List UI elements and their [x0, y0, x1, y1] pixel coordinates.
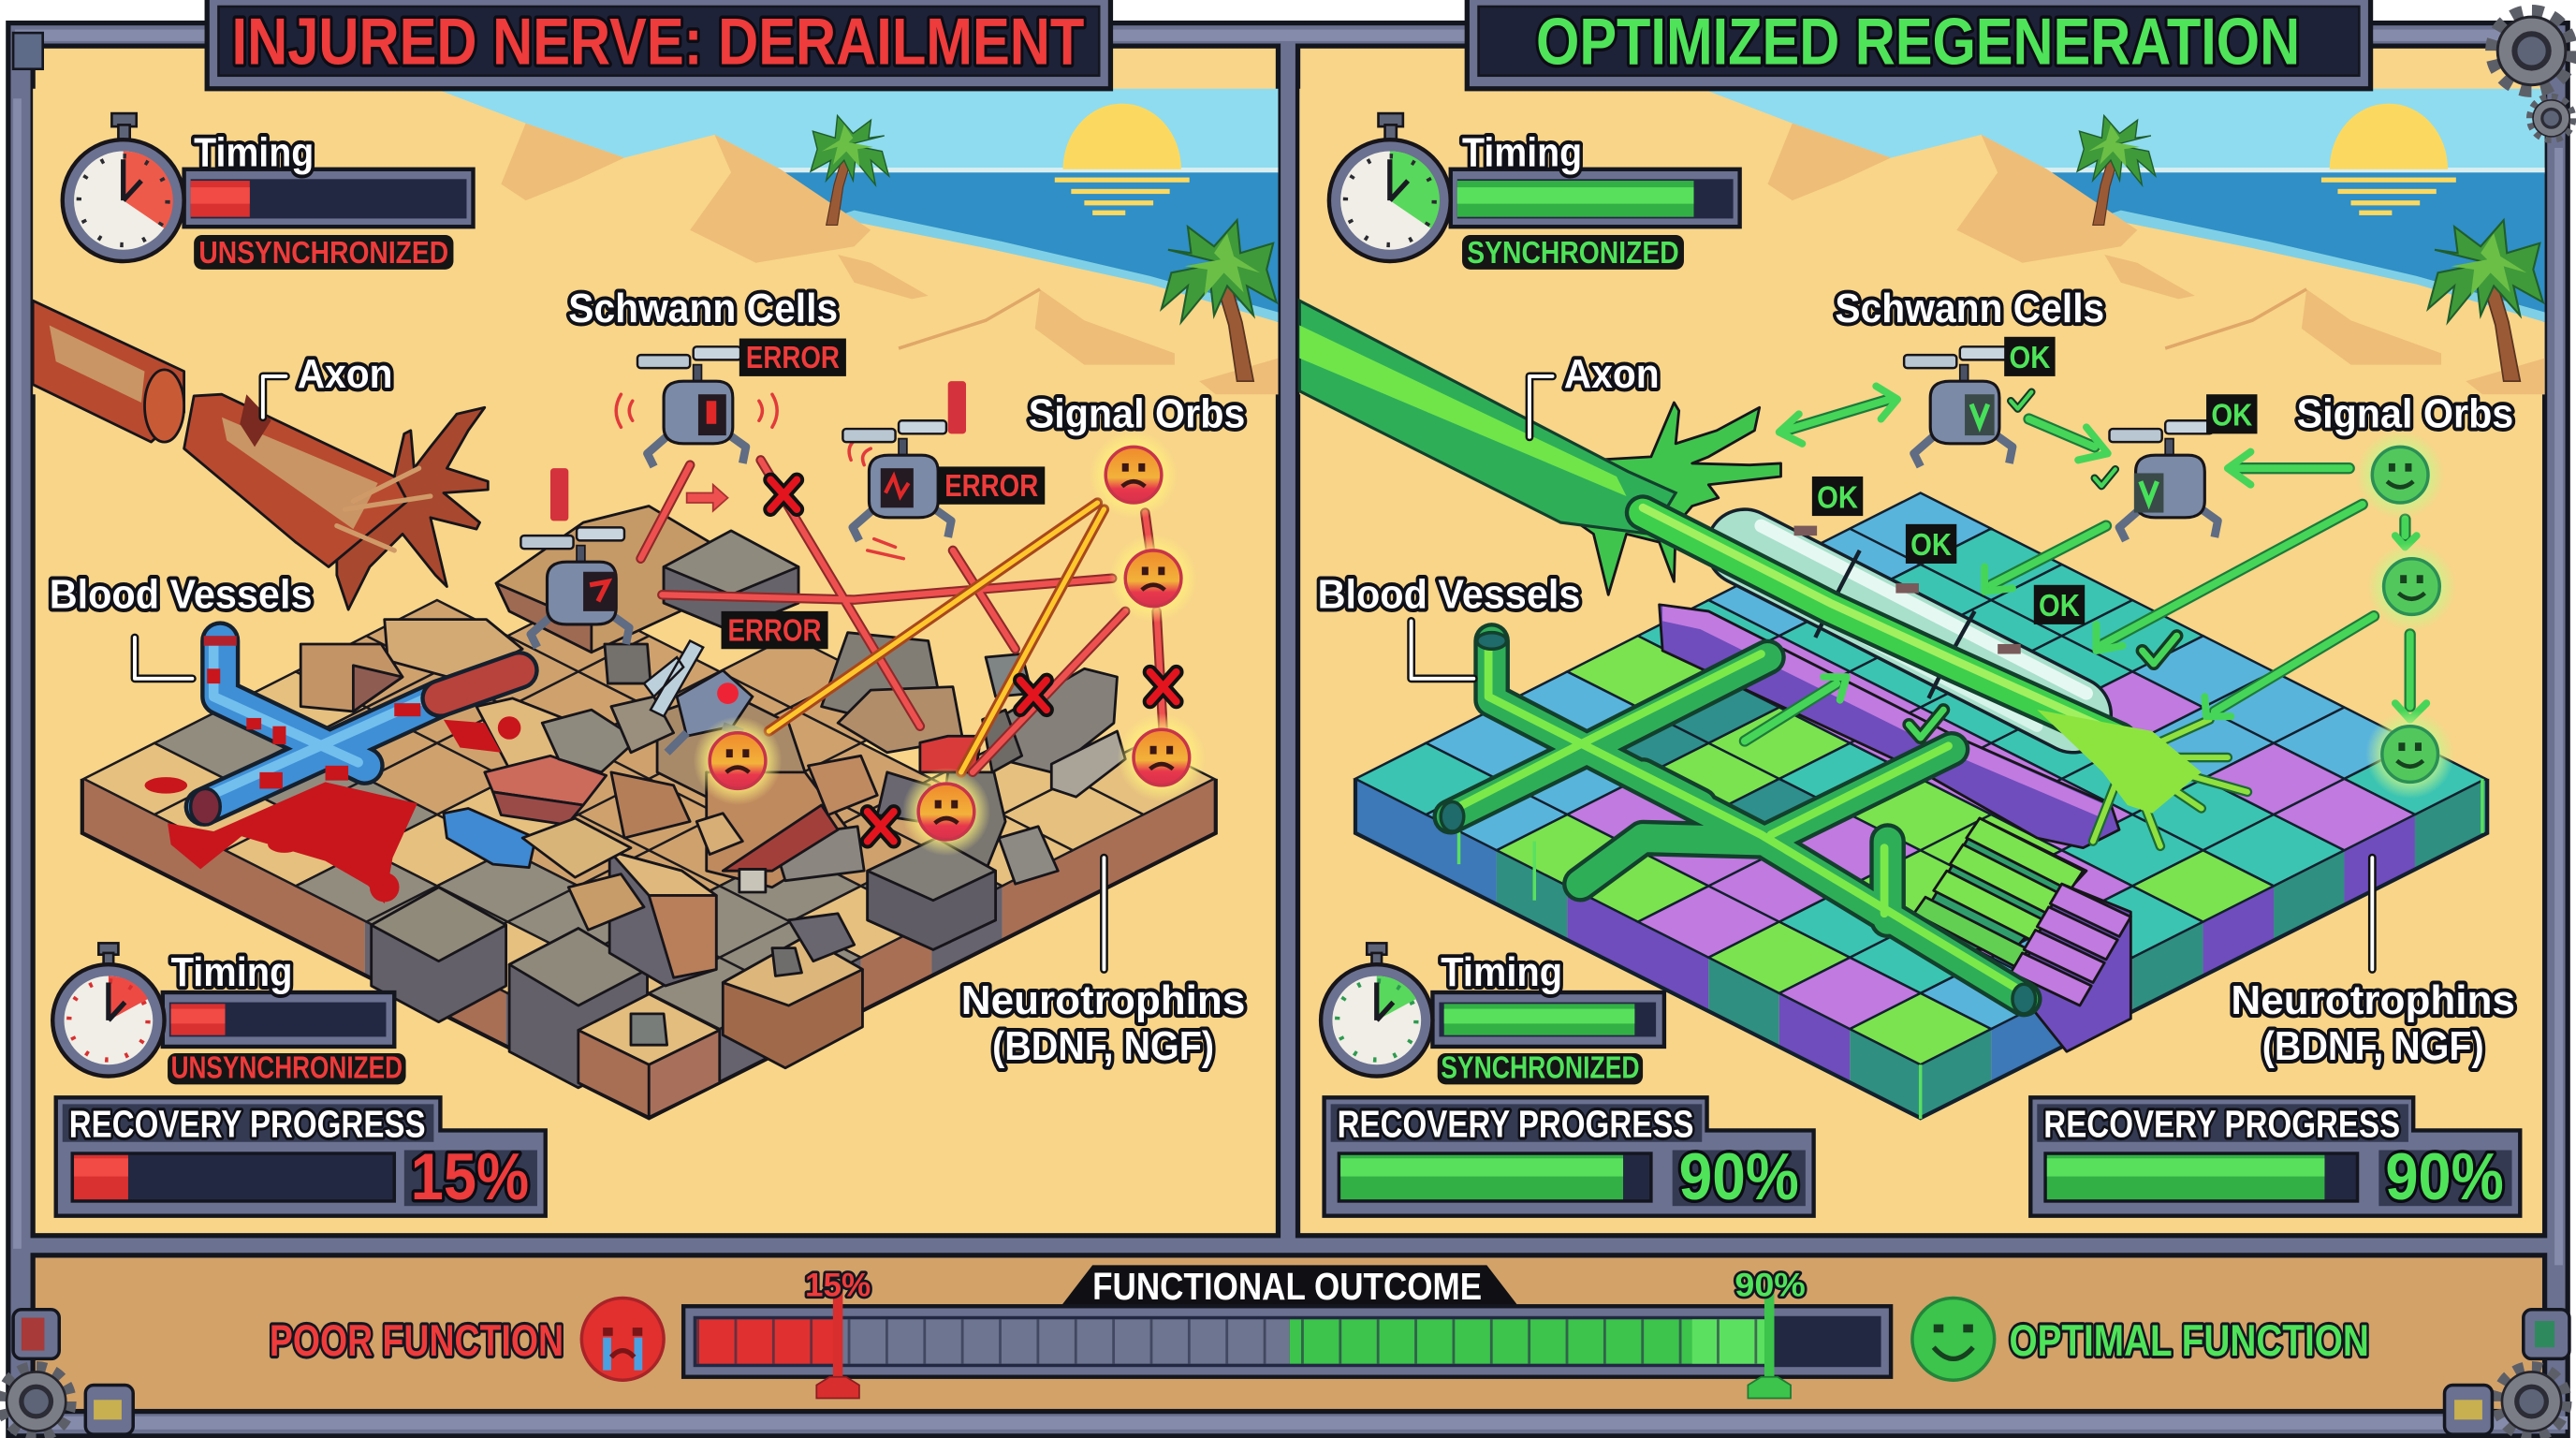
poor function label: POOR FUNCTION — [270, 1316, 564, 1366]
outcome gauge — [683, 1306, 1891, 1377]
labels left: Axon — [298, 351, 393, 397]
title right: OPTIMIZED REGENERATION — [1536, 4, 2300, 78]
labels right: (BDNF, NGF) — [2262, 1023, 2484, 1069]
recovery progress 90 percent: right — [2030, 1097, 2520, 1216]
timing widget: top left: UNSYNCHRONIZED — [198, 236, 448, 271]
recovery progress 90 percent: left — [1325, 1097, 1814, 1216]
beach background left — [33, 89, 1278, 394]
schwann tube sheath — [1725, 526, 2086, 726]
axon: severed — [33, 301, 488, 609]
beach background right — [1299, 89, 2545, 394]
rubble blocks — [300, 506, 1125, 1117]
labels left: Neurotrophins — [961, 977, 1245, 1023]
happy signal orbs — [2356, 431, 2456, 799]
schwann cell drones: ok — [1904, 346, 2217, 540]
title left: INJURED NERVE: DERAILMENT — [232, 4, 1084, 78]
labels right: Blood Vessels — [1318, 571, 1580, 617]
red error arrows — [550, 381, 1177, 842]
schwann cell drones: error — [520, 346, 951, 753]
timing widget: top right: SYNCHRONIZED — [1467, 236, 1679, 271]
green ok arrows — [1745, 386, 2426, 741]
blood vessels: healthy — [1441, 633, 2036, 1014]
labels right: Neurotrophins — [2231, 977, 2515, 1023]
timing widget: top right — [1329, 113, 1740, 271]
labels left: Blood Vessels — [50, 571, 313, 617]
recovery progress 90 percent: left: 90% — [1679, 1139, 1799, 1213]
labels right: Axon — [1564, 351, 1660, 397]
recovery progress 15 percent — [56, 1097, 546, 1216]
recovery progress 15 percent: RECOVERY PROGRESS — [69, 1102, 426, 1145]
recovery progress 90 percent: right: RECOVERY PROGRESS — [2043, 1102, 2400, 1145]
timing widget: lower left: Timing — [171, 949, 292, 995]
sad signal orbs — [694, 431, 1206, 856]
timing widget: lower right — [1321, 943, 1664, 1085]
panel: injured nerve — [33, 46, 1278, 1236]
raised green tile highlights — [1457, 779, 2484, 1119]
purple raised strip — [1660, 605, 2119, 848]
labels right — [1318, 286, 2515, 1069]
icon: happy face — [1912, 1298, 1995, 1380]
marker 90 percent: 90% — [1734, 1268, 1806, 1304]
labels right: Signal Orbs — [2297, 390, 2513, 436]
timing widget: top left — [63, 113, 474, 271]
timing widget: lower left — [52, 943, 406, 1085]
axon: regenerating — [1299, 301, 2247, 846]
isometric platform: rubble — [82, 493, 1216, 1119]
recovery progress 90 percent: right: 90% — [2385, 1139, 2504, 1213]
timing widget: top left: Timing — [194, 129, 314, 175]
blood pool — [145, 716, 520, 903]
labels left: Signal Orbs — [1029, 390, 1245, 436]
timing widget: top right: Timing — [1462, 129, 1582, 175]
labels right: OK — [2211, 399, 2252, 433]
labels left: ERROR — [944, 469, 1038, 504]
labels left: ERROR — [746, 341, 840, 375]
labels right: OK — [1817, 480, 1858, 515]
marker 90 percent — [1734, 1268, 1806, 1399]
marker 15 percent: 15% — [805, 1268, 871, 1304]
outcome heading: FUNCTIONAL OUTCOME — [1092, 1265, 1482, 1308]
labels right: Schwann Cells — [1835, 286, 2104, 331]
recovery progress 15 percent: 15% — [411, 1139, 529, 1213]
isometric platform: healthy tiles — [1355, 493, 2487, 1119]
panel: optimized regeneration — [1298, 46, 2545, 1236]
optimal function label: OPTIMAL FUNCTION — [2009, 1316, 2369, 1366]
icon: crying face — [581, 1298, 664, 1380]
timing widget: lower right: SYNCHRONIZED — [1441, 1050, 1640, 1085]
labels left: ERROR — [728, 613, 822, 648]
labels left: Schwann Cells — [568, 286, 838, 331]
labels right: OK — [1910, 528, 1952, 563]
labels right: OK — [2039, 589, 2080, 624]
labels left — [50, 286, 1245, 1069]
marker 15 percent — [805, 1268, 871, 1399]
blood vessels: damaged — [191, 636, 520, 825]
functional outcome panel — [33, 1255, 2545, 1412]
timing widget: lower right: Timing — [1441, 949, 1562, 995]
labels right: OK — [2009, 341, 2050, 375]
labels left: (BDNF, NGF) — [992, 1023, 1214, 1069]
green stairs — [1914, 818, 2086, 966]
purple stairs — [2011, 884, 2130, 1051]
recovery progress 90 percent: left: RECOVERY PROGRESS — [1338, 1102, 1693, 1145]
timing widget: lower left: UNSYNCHRONIZED — [171, 1050, 402, 1085]
